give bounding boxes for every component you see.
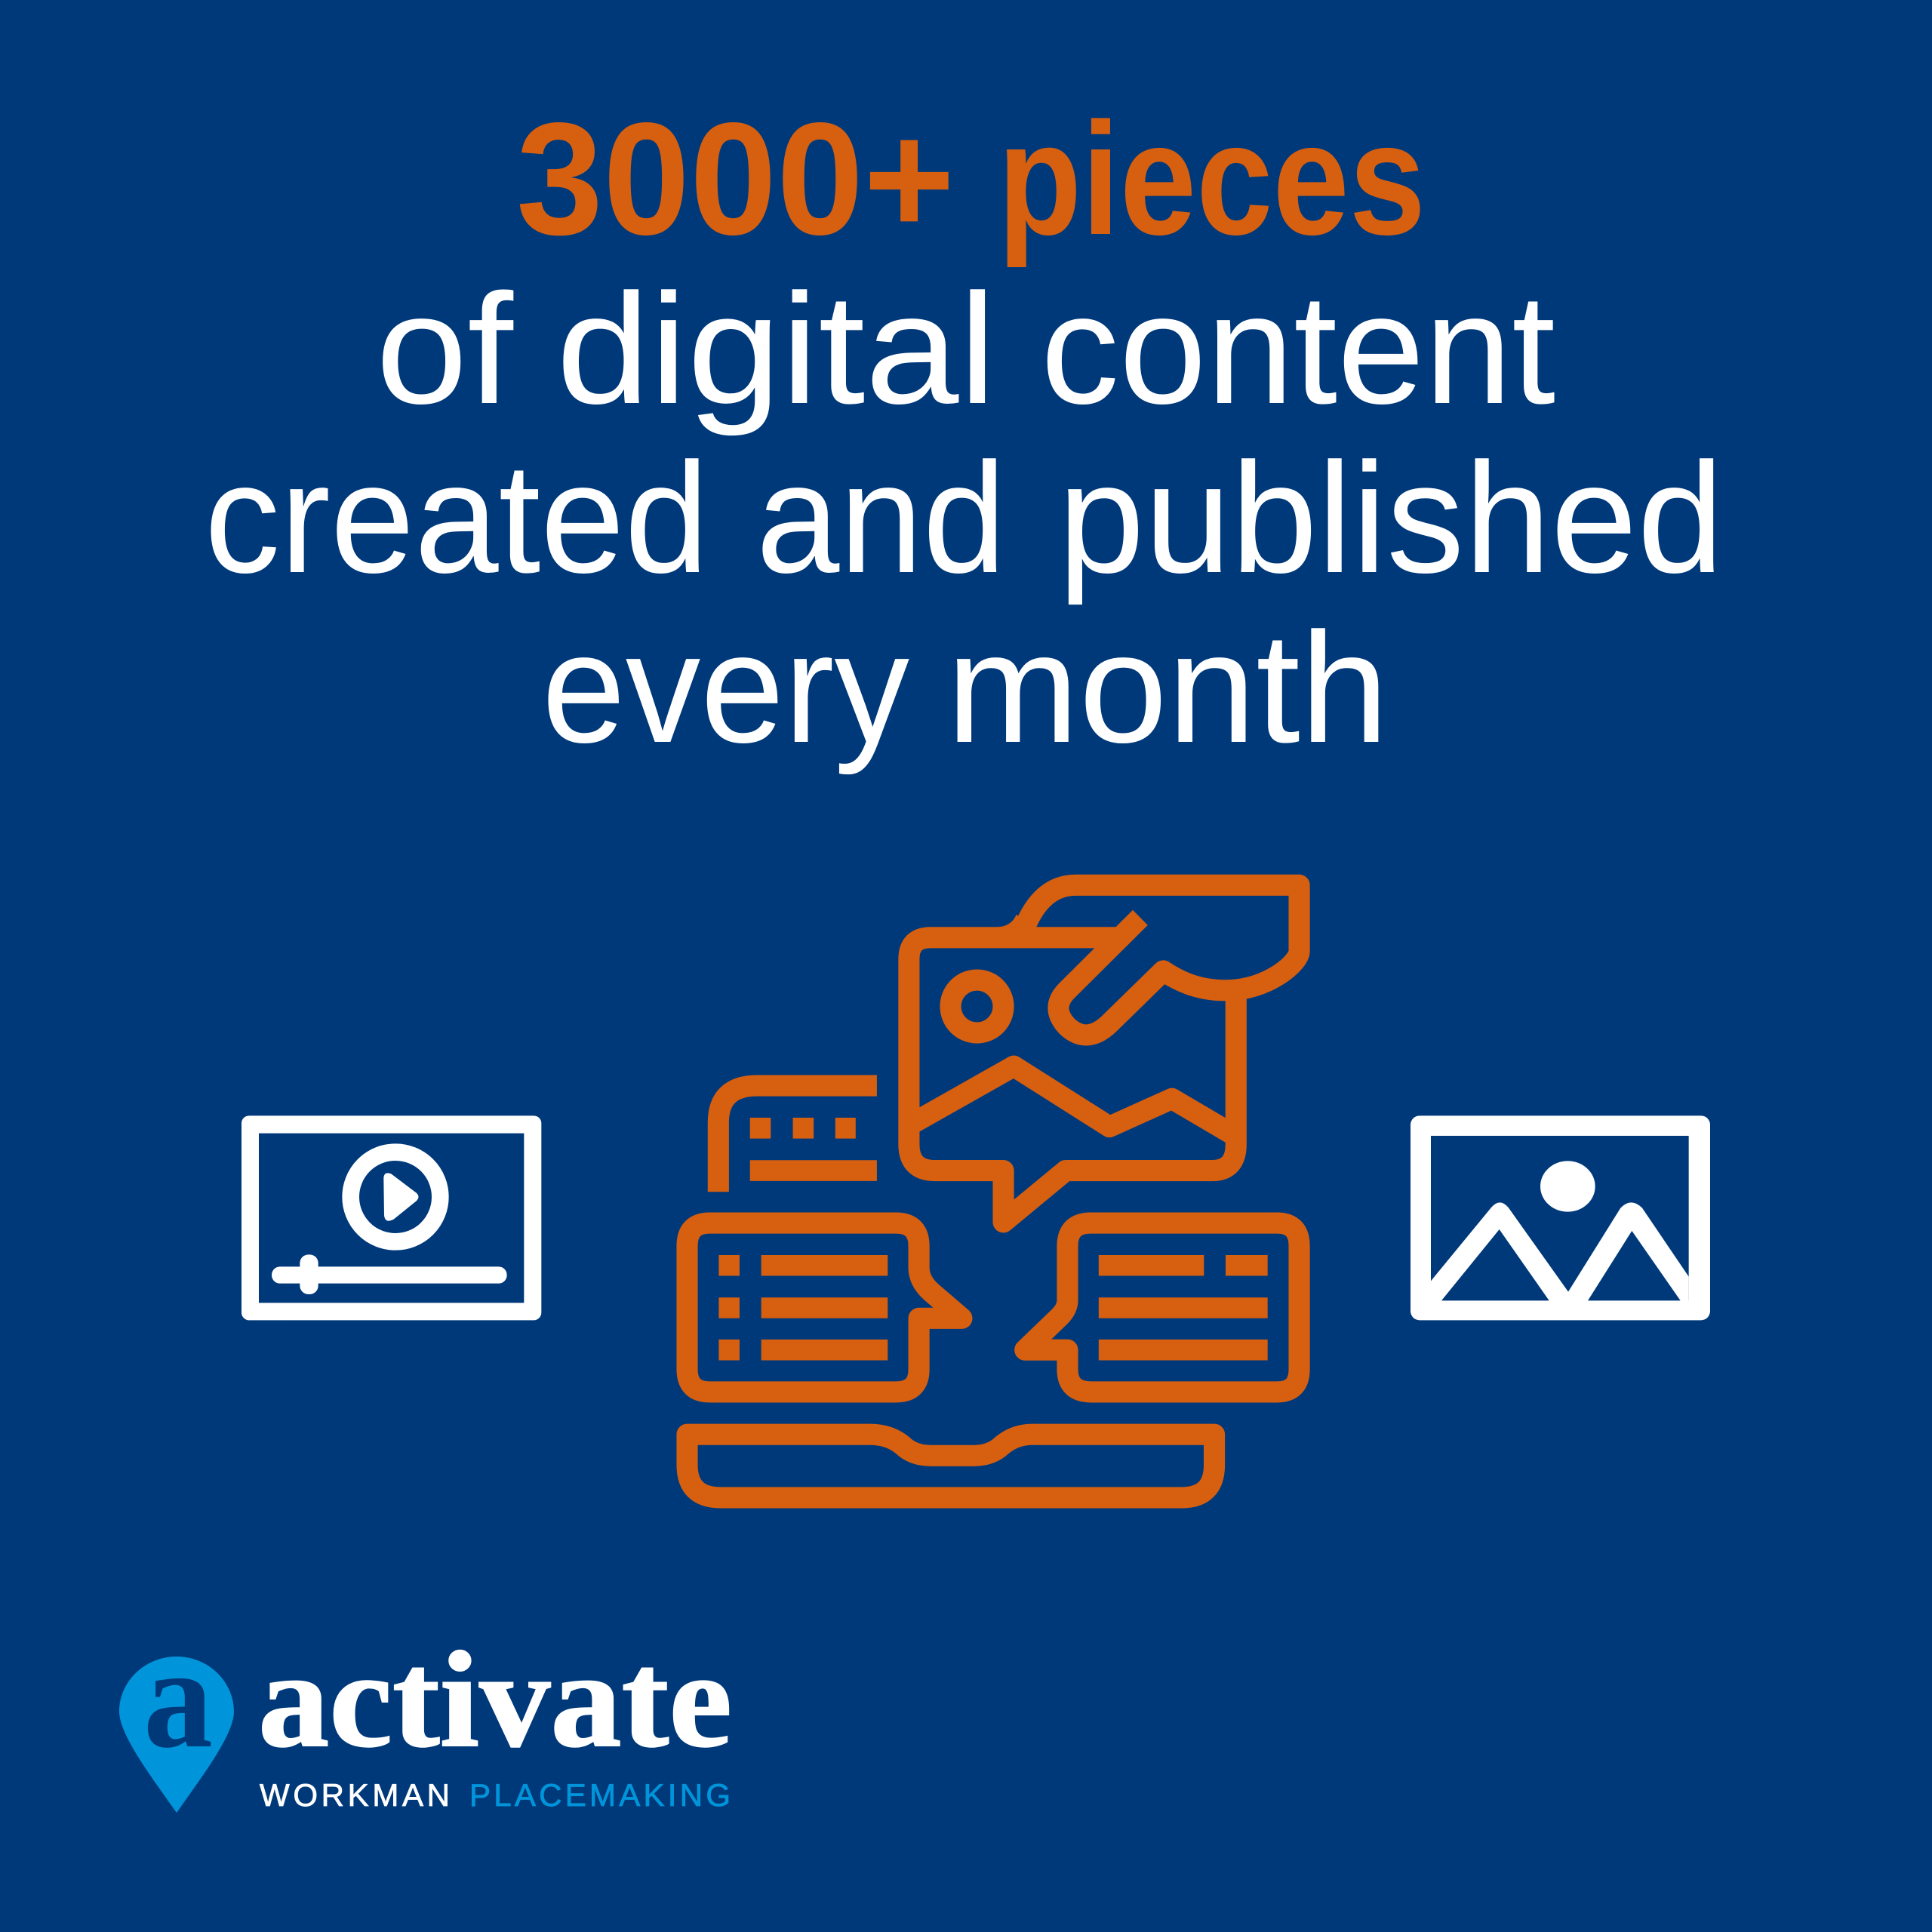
right message bubble: [1025, 1223, 1300, 1392]
title line: every month: [542, 601, 1389, 776]
logo: [119, 1617, 732, 1813]
icon: video player: [242, 1115, 541, 1320]
logo pin: [119, 1657, 234, 1813]
title line: of digital content: digital: [556, 262, 996, 437]
title line: of digital content: of: [376, 262, 514, 437]
logo pin letter: a: [143, 1617, 213, 1778]
title line: created and published: created: [205, 431, 709, 606]
title: [205, 89, 1724, 776]
title line: created and published: [205, 431, 1724, 606]
title line: created and published: and: [756, 431, 1006, 606]
icon: digital content cluster: [688, 885, 1300, 1497]
image speech bubble with folded top: [909, 885, 1300, 1222]
headline: 3000+ pieces: 3000+: [516, 89, 955, 268]
title line: every month: every: [542, 601, 909, 776]
title line: of digital content: content: [1041, 262, 1555, 437]
logo wordmark: activate: [258, 1624, 732, 1776]
small text card: [718, 1086, 877, 1192]
logo tagline: workman: WORKMAN: [260, 1777, 450, 1813]
logo tagline: placemaking: PLACEMAKING: [469, 1777, 731, 1813]
headline: 3000+ pieces: pieces: [998, 89, 1426, 268]
title line: every month: month: [946, 601, 1389, 776]
icon: picture with mountains: [1411, 1115, 1710, 1320]
title line: of digital content: [376, 262, 1555, 437]
left message bubble: [688, 1223, 961, 1392]
tablet base: [688, 1435, 1214, 1497]
title line: created and published: published: [1058, 431, 1724, 606]
headline: 3000+ pieces: [516, 89, 1426, 268]
